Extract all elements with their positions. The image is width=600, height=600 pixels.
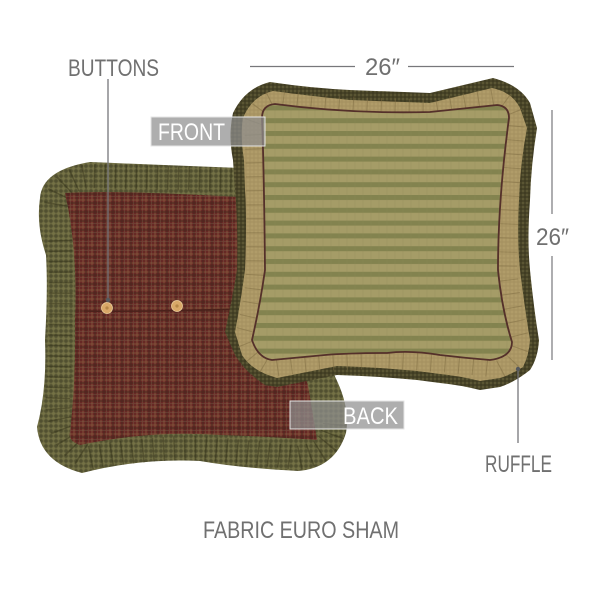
button flap fold — [84, 309, 235, 311]
back panel: red plaid — [65, 192, 317, 445]
label box: FRONT — [151, 117, 265, 146]
icon: right button — [172, 300, 182, 312]
label: RUFFLE: RUFFLE — [485, 451, 552, 478]
front panel: green stripes — [252, 104, 512, 360]
leader line: buttons — [106, 79, 110, 302]
front ruffle pleats — [244, 97, 521, 369]
front outer dark ruffle — [225, 78, 539, 390]
height dimension: 26 inches: 26″ — [536, 224, 569, 251]
back ruffle pleats — [56, 176, 335, 458]
width dimension: 26 inches: 26″ — [365, 54, 400, 81]
back pillow — [37, 162, 347, 473]
label box: BACK: BACK — [343, 403, 398, 430]
back ruffle — [37, 162, 347, 473]
front tan ruffle — [235, 88, 530, 381]
front panel piping — [252, 104, 512, 360]
label box: FRONT: FRONT — [158, 119, 225, 146]
front pillow — [225, 78, 539, 390]
caption: FABRIC EURO SHAM — [203, 517, 399, 544]
icon: left button — [102, 302, 112, 314]
label box: BACK — [290, 401, 404, 430]
leader line: ruffle — [516, 367, 520, 443]
label: BUTTONS: BUTTONS — [68, 55, 159, 82]
